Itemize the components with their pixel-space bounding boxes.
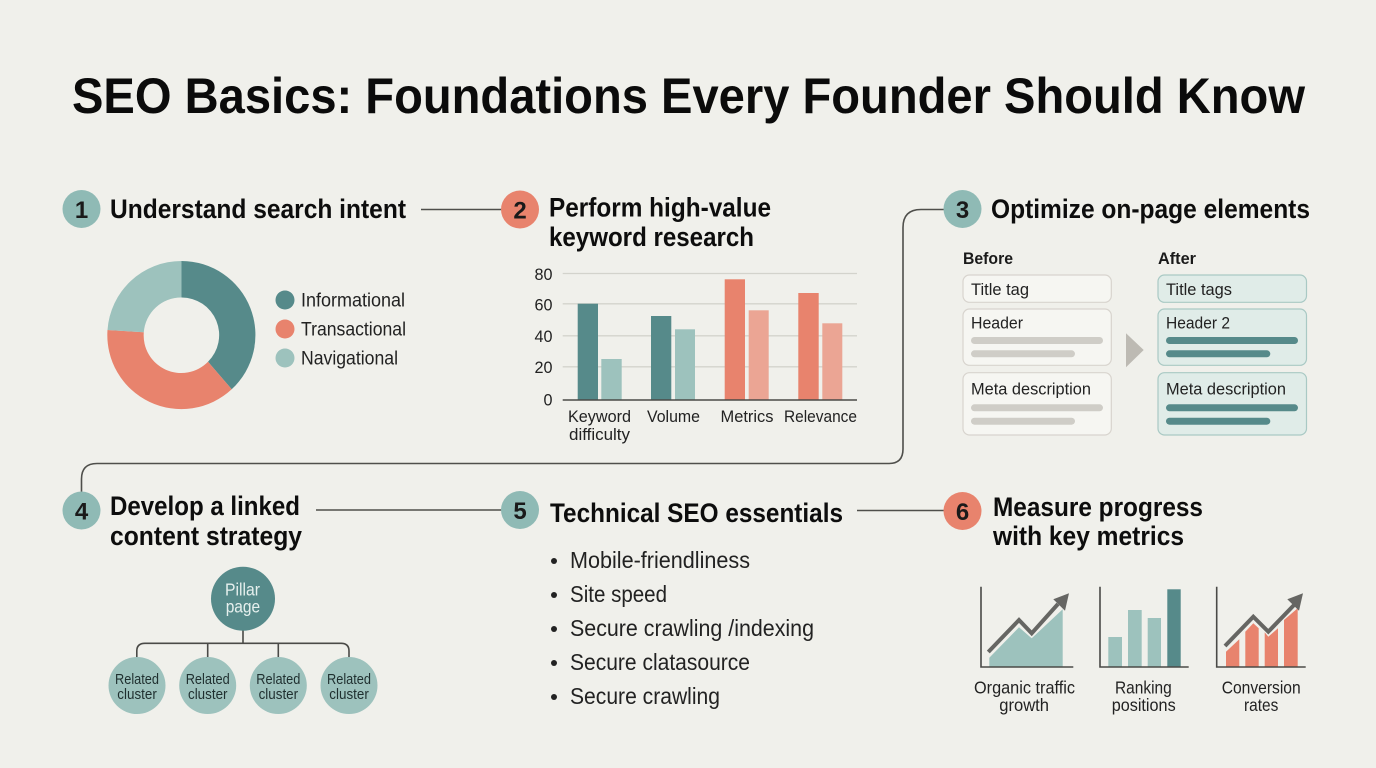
pillar and cluster diagram: cluster [259, 686, 298, 703]
heading: perform high-value keyword research: Perform high-value [549, 192, 771, 222]
bar chart: difficulty [569, 425, 630, 444]
legend [276, 290, 406, 370]
title: SEO Basics: Foundations Every Founder Should Know [72, 68, 1305, 124]
chart: organic traffic growth: Organic traffic [974, 678, 1075, 698]
chart: conversion rates: rates [1244, 695, 1279, 715]
chart: organic traffic growth: growth [999, 695, 1049, 715]
before column: Header [971, 314, 1023, 332]
after column: After [1158, 250, 1197, 268]
before column [963, 250, 1111, 435]
arrow: connector step 1 to step 2 [421, 208, 502, 210]
chart: organic traffic growth [974, 587, 1075, 715]
bar chart: Volume [647, 407, 700, 426]
step number 5: 5 [513, 498, 527, 525]
step number 6 [944, 492, 982, 530]
arrow: connector step 5 to step 6 [857, 510, 944, 512]
panel: step 6 key metrics [944, 492, 1306, 715]
bar chart: Keyword [568, 407, 631, 426]
after column [1158, 250, 1306, 435]
step number 3: 3 [956, 197, 969, 224]
panel: step 5 technical SEO [501, 491, 843, 709]
chart: ranking positions: Ranking [1115, 678, 1172, 698]
after column: Title tags [1166, 280, 1232, 299]
heading: develop a linked content strategy: content strategy [110, 521, 302, 551]
bullet list: Secure clatasource [570, 649, 750, 675]
pillar and cluster diagram: cluster [329, 686, 369, 703]
pillar and cluster diagram: page [226, 597, 260, 617]
heading: develop a linked content strategy: Develop a linked [110, 491, 300, 521]
bullet list: Site speed [570, 581, 667, 607]
before column: Meta description [971, 380, 1091, 398]
arrow: connector step 2 to step 3 and 4 [82, 210, 944, 492]
heading: develop a linked content strategy [110, 491, 302, 551]
bar chart [534, 266, 857, 444]
heading: perform high-value keyword research: keyword research [549, 222, 754, 252]
heading: measure progress with key metrics: with key metrics [992, 521, 1184, 551]
legend: Informational [301, 290, 405, 312]
panel: step 4 content strategy [62, 491, 378, 714]
pillar and cluster diagram: Related [327, 671, 371, 688]
legend: Transactional [301, 320, 406, 340]
step number 5 [501, 491, 539, 529]
chart: ranking positions [1100, 587, 1189, 715]
pillar and cluster diagram: cluster [117, 686, 157, 703]
step number 3 [944, 190, 982, 228]
step number 2: 2 [513, 198, 527, 224]
heading: optimize on-page elements: Optimize on-page elements [991, 194, 1310, 224]
heading: understand search intent: Understand search intent [110, 194, 406, 224]
step number 4 [62, 492, 100, 530]
before column: Title tag [971, 280, 1029, 299]
legend: Navigational [301, 348, 398, 370]
pillar and cluster diagram: cluster [188, 686, 228, 703]
bullet list: Secure crawling /indexing [570, 615, 814, 641]
step number 2 [501, 190, 539, 228]
pillar and cluster diagram: Related [115, 671, 159, 688]
panel: step 2 keyword research [501, 190, 857, 444]
bar chart: 20 [534, 359, 552, 377]
heading: perform high-value keyword research [549, 192, 771, 252]
chart: conversion rates: Conversion [1222, 678, 1301, 698]
bar chart: Relevance [784, 407, 857, 426]
after column: Header 2 [1166, 314, 1230, 332]
step number 1: 1 [75, 197, 88, 224]
arrow: connector step 4 to step 5 [316, 509, 502, 511]
bullet list: Secure crawling [570, 683, 720, 709]
donut chart [107, 261, 255, 409]
bar chart: 0 [544, 392, 552, 410]
chart: ranking positions: positions [1112, 695, 1176, 715]
heading: technical SEO essentials: Technical SEO essentials [550, 498, 843, 528]
heading: measure progress with key metrics [992, 492, 1203, 551]
bar chart: Metrics [720, 407, 774, 426]
bullet list: Mobile-friendliness [570, 547, 750, 573]
pillar and cluster diagram: Related [256, 671, 300, 688]
bar chart: 80 [534, 266, 552, 284]
before column: Before [963, 250, 1013, 268]
bullet list [551, 547, 814, 709]
bar chart: 40 [534, 328, 552, 346]
pillar and cluster diagram: Pillar [225, 580, 260, 600]
chart: conversion rates [1217, 587, 1306, 715]
step number 6: 6 [956, 499, 969, 526]
panel: step 3 on-page elements [944, 190, 1310, 435]
pillar and cluster diagram: Related [186, 671, 230, 688]
arrow: before to after [1126, 333, 1144, 367]
panel: step 1 search intent [62, 190, 406, 409]
heading: measure progress with key metrics: Measure progress [993, 492, 1203, 522]
pillar and cluster diagram [108, 567, 378, 714]
step number 1 [62, 190, 100, 228]
after column: Meta description [1166, 380, 1286, 398]
step number 4: 4 [75, 498, 89, 526]
bar chart: 60 [534, 296, 552, 314]
